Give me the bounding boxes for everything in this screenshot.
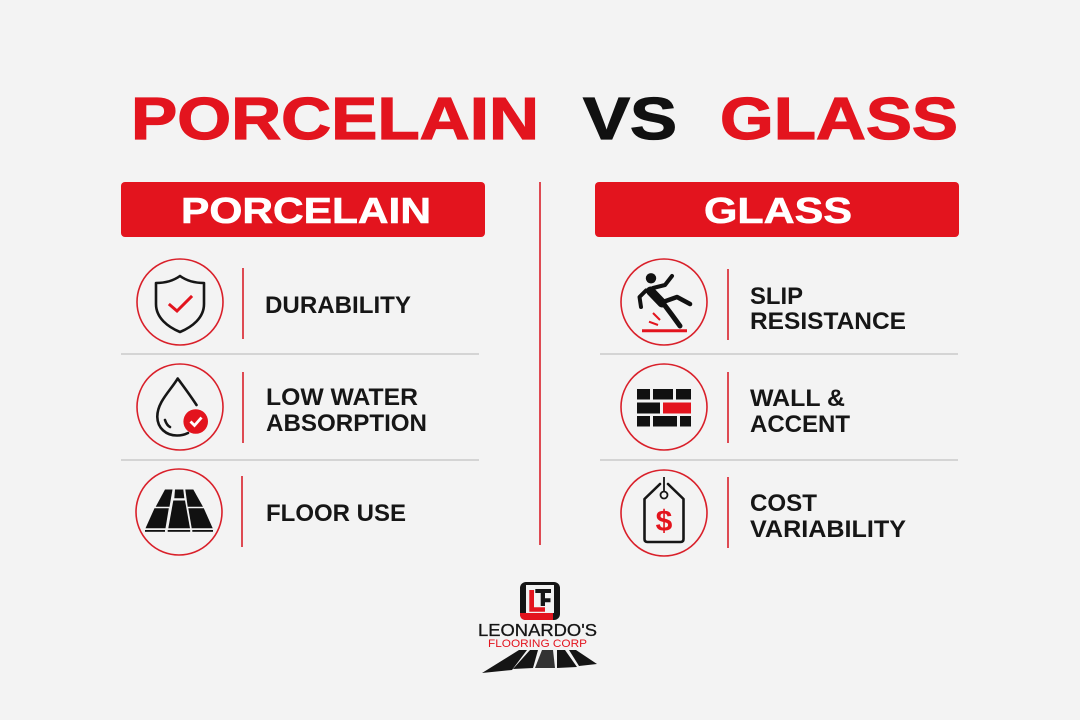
icon: brick wall	[637, 389, 691, 426]
icon: price tag	[644, 477, 684, 542]
logo wordmark: LEONARDO'S	[478, 620, 597, 640]
row: low water absorption	[137, 364, 427, 450]
panel: porcelain	[121, 182, 485, 555]
row: floor use	[136, 469, 406, 555]
logo tagline: FLOORING CORP	[488, 638, 587, 650]
label: slip resistance: RESISTANCE	[750, 308, 906, 335]
title	[131, 86, 958, 152]
porcelain header bar	[121, 182, 485, 237]
logo floor planks	[482, 650, 597, 673]
label: floor use: FLOOR USE	[266, 500, 406, 527]
row: cost variability	[621, 470, 906, 556]
title: GLASS	[720, 86, 958, 152]
icon: floor tiles	[145, 490, 213, 532]
label: wall and accent: WALL &	[750, 385, 845, 412]
label: wall and accent: ACCENT	[750, 411, 850, 438]
icon: shield with check	[156, 276, 204, 332]
label: low water absorption: ABSORPTION	[266, 410, 427, 437]
label: cost variability: COST	[750, 490, 817, 517]
label: cost variability: VARIABILITY	[750, 516, 906, 543]
icon: price tag: $	[656, 505, 673, 538]
label: low water absorption: LOW WATER	[266, 384, 418, 411]
panel: glass	[595, 182, 959, 556]
row: durability	[137, 259, 411, 345]
label: durability: DURABILITY	[265, 292, 411, 319]
title: VS	[583, 86, 677, 152]
row: wall and accent	[621, 364, 850, 450]
label: slip resistance	[750, 283, 906, 335]
logo emblem	[520, 582, 560, 620]
label: slip resistance: SLIP	[750, 283, 803, 310]
label: cost variability	[750, 490, 906, 543]
row: slip resistance	[621, 259, 906, 345]
label: wall and accent	[750, 385, 850, 438]
label: low water absorption	[266, 384, 427, 437]
icon: slipping person	[640, 273, 690, 331]
center divider	[539, 182, 541, 545]
title: PORCELAIN	[131, 86, 539, 152]
porcelain header bar: PORCELAIN	[181, 190, 431, 231]
glass header bar	[595, 182, 959, 237]
glass header bar: GLASS	[704, 190, 852, 231]
icon: water drop with check badge	[157, 378, 208, 436]
logo: Leonardo's Flooring Corp	[478, 582, 597, 673]
